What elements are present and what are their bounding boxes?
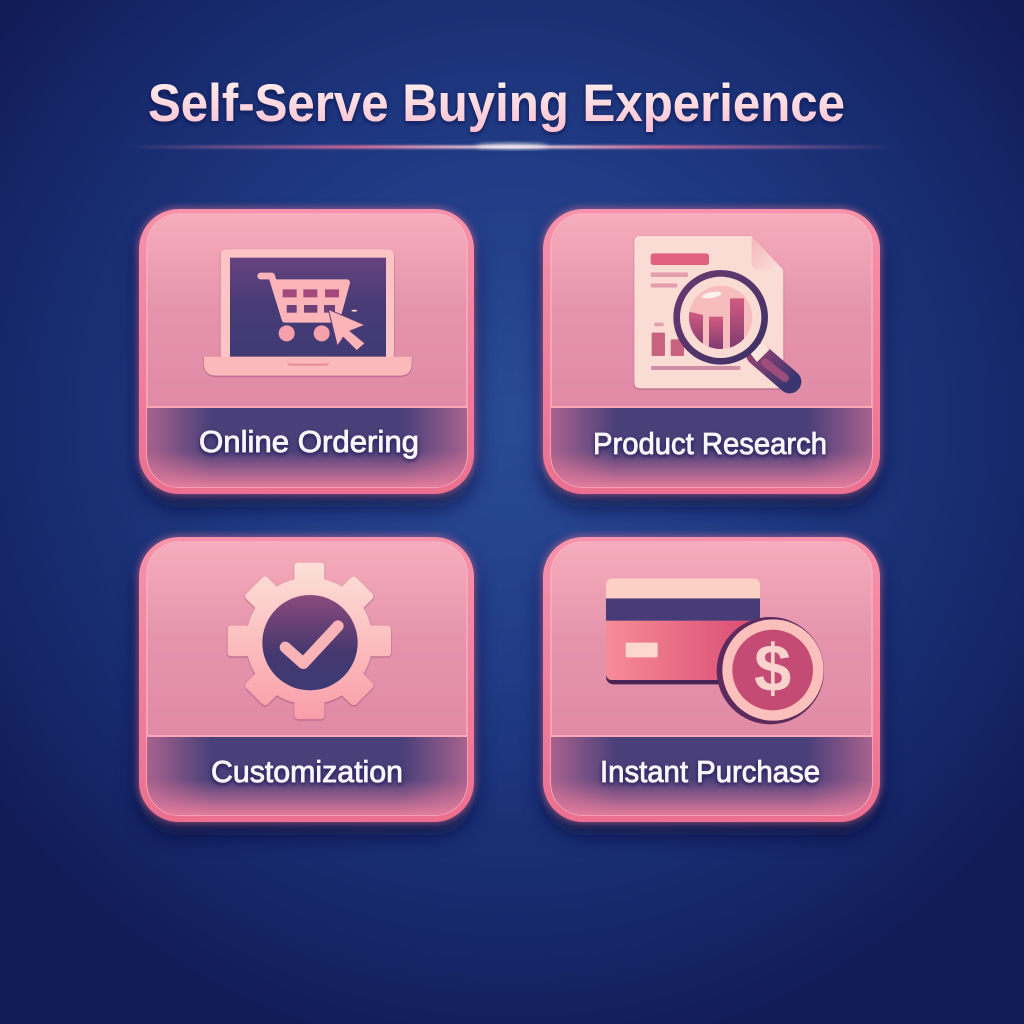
title underline glow	[125, 144, 895, 148]
panel: online ordering	[138, 208, 475, 507]
label: instant purchase: Instant Purchase	[600, 754, 820, 789]
label: online ordering: Online Ordering	[199, 424, 419, 459]
label: customization: Customization	[211, 754, 403, 789]
label: product research: Product Research	[593, 426, 827, 461]
title: Self-Serve Buying Experience	[148, 74, 845, 133]
panel: product research	[542, 208, 881, 507]
icon: credit card and dollar coin: $	[754, 632, 791, 706]
panel: customization	[138, 536, 475, 835]
panel: instant purchase	[542, 536, 881, 835]
icon: credit card and dollar coin	[606, 578, 824, 724]
icon: document with magnifying glass	[634, 236, 790, 388]
icon: gear with check mark	[228, 563, 391, 719]
icon: laptop with shopping cart	[204, 249, 412, 376]
